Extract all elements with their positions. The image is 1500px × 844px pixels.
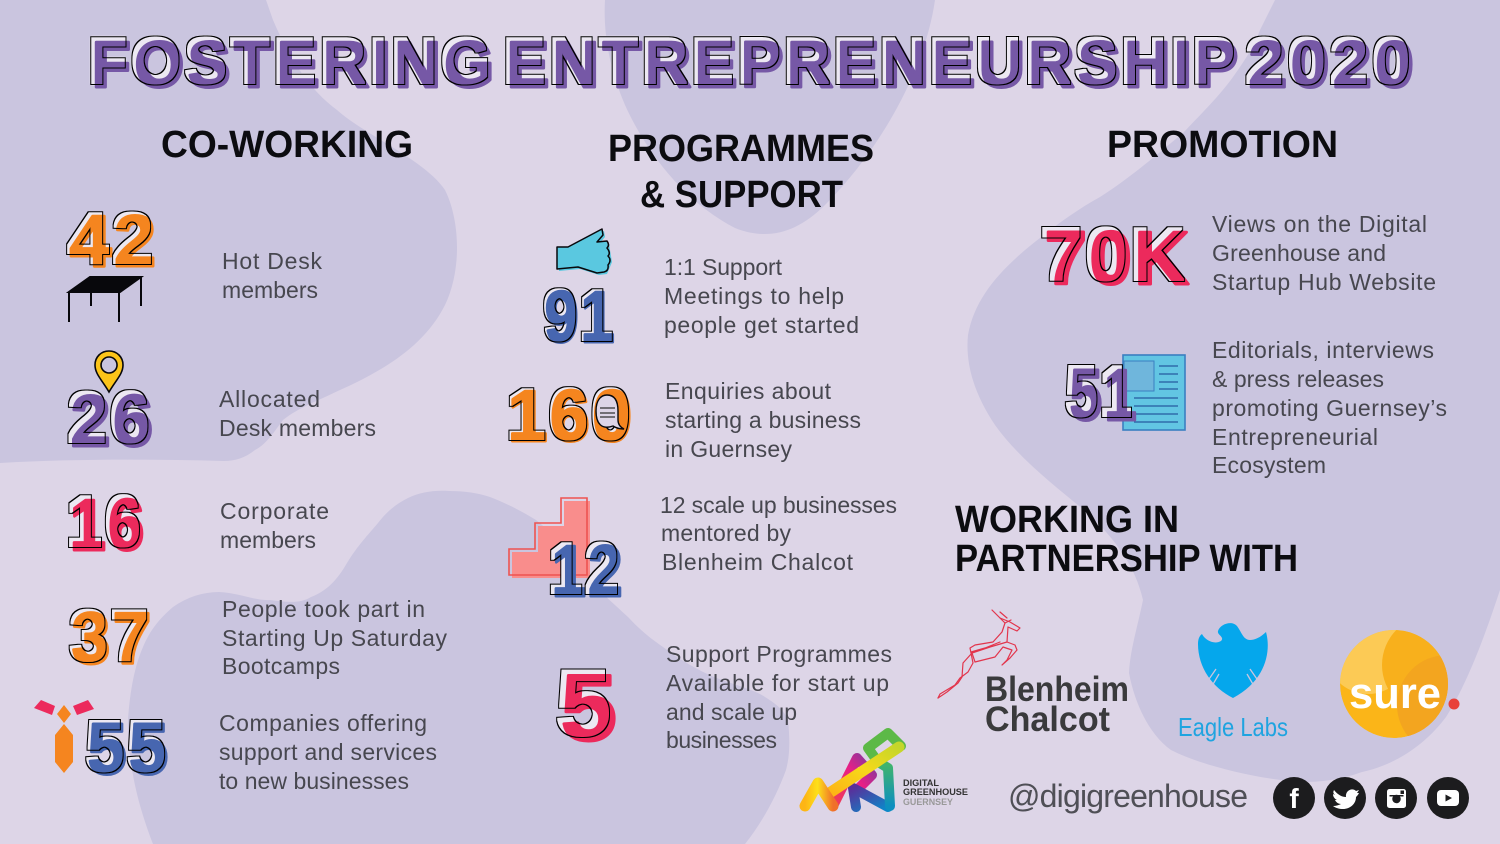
number 37: 37 [69,596,151,676]
social icons [1273,777,1469,819]
text: editorials [1212,337,1447,478]
number 26: 26 [67,378,152,458]
text: companies offering: to new businesses [219,768,409,794]
text: support programmes [666,641,892,753]
text: support meetings: 1:1 Support [664,254,783,280]
text: allocated desk members: Desk members [219,415,376,441]
icon: eagle [1198,623,1268,698]
number 42: 42 [67,199,156,279]
text: scale up businesses [660,492,897,575]
text: people took part: Starting Up Saturday [222,625,448,651]
icon: instagram [1375,777,1417,819]
wordmark: DIGITAL [903,778,939,789]
text: editorials: promoting Guernsey’s [1212,395,1447,421]
text: support meetings: Meetings to help [664,283,844,309]
stat: 51 editorials [1065,337,1447,478]
icon: twitter [1324,777,1366,819]
text: editorials: Entrepreneurial [1212,424,1378,450]
text: editorials: Editorials, interviews [1212,337,1434,363]
text: enquiries [665,378,861,462]
number 70K: 70K [1040,212,1187,296]
number 91: 91 [543,276,615,356]
number 91: 91 [545,278,617,358]
text: support programmes: businesses [666,727,777,753]
number 91: 91 [543,276,615,356]
title: ENTREPRENEURSHIP [503,24,1238,97]
title: 2020 [1249,28,1418,101]
number 42: 42 [70,202,159,282]
number 12: 12 [548,529,621,609]
number 16: 16 [66,482,143,562]
text: corporate members: members [220,527,316,553]
text: people took part: Bootcamps [222,653,340,679]
text: scale up businesses: 12 scale up businesses [660,492,897,518]
number 51: 51 [1065,352,1134,432]
stat: 70K website views [1040,211,1436,300]
text: hot desk members: Hot Desk [222,248,322,274]
icon: desk [69,277,141,322]
heading: programmes and support: PROGRAMMES [608,128,874,170]
title: FOSTERING [88,24,494,97]
title: 2020 [1245,24,1414,97]
heading: programmes and support: & SUPPORT [640,174,843,216]
number 26: 26 [67,378,152,458]
icon: stairs [509,498,590,578]
text: support meetings [664,254,859,338]
number 51: 51 [1065,352,1134,432]
text: website views [1212,211,1436,295]
icon: necktie [34,700,94,773]
text: hot desk members [222,248,322,303]
title: ENTREPRENEURSHIP [507,28,1242,101]
title [88,24,1418,101]
number 55: 55 [88,710,171,790]
text: enquiries: in Guernsey [665,436,792,462]
wordmark: Blenheim [985,670,1129,709]
social handle: @digigreenhouse [1008,778,1248,814]
number 12: 12 [548,529,621,609]
stat: 91 support meetings [543,229,859,358]
stat: 16 corporate members [66,482,329,566]
number 16: 16 [66,482,143,562]
number 37: 37 [72,599,154,679]
logo: Eagle Labs [1178,623,1288,742]
text: support programmes: Available for start up [666,670,889,696]
wordmark [985,670,1129,739]
text: corporate members [220,498,329,553]
text: allocated desk members [219,386,376,441]
number 160: 160 [508,377,635,457]
number 5: 5 [555,650,614,755]
number 37: 37 [69,596,151,676]
wordmark: GREENHOUSE [903,787,968,798]
text: allocated desk members: Allocated [219,386,320,412]
stat: 55 companies [34,700,437,794]
text: corporate members: Corporate [220,498,329,524]
stat: 26 allocated desk members [67,351,376,462]
icon: leaping antelope [938,610,1020,698]
stat: 5 support programmes [555,641,892,760]
number 55: 55 [85,707,168,787]
number 5: 5 [555,650,614,755]
text: companies offering: Companies offering [219,710,427,736]
number 26: 26 [71,382,156,462]
heading: working in partnership with: WORKING IN [955,499,1179,541]
logo: Blenheim Chalcot [938,610,1129,739]
text: enquiries: Enquiries about [665,378,832,404]
number 70K: 70K [1045,216,1192,300]
number 160: 160 [506,375,633,455]
text: editorials: & press releases [1212,366,1384,392]
number 42: 42 [67,199,156,279]
number 5: 5 [561,655,620,760]
wordmark: Eagle Labs [1178,712,1288,742]
number 16: 16 [70,486,147,566]
number 70K: 70K [1040,212,1187,296]
text: scale up businesses: Blenheim Chalcot [662,549,854,575]
stat: 42 hot desk members [67,199,322,322]
icon: colourful chain mark [805,733,901,807]
icon: youtube [1427,777,1469,819]
title: ENTREPRENEURSHIP [503,24,1238,97]
text: people took part [222,596,448,679]
heading: co-working: CO-WORKING [161,124,413,166]
wordmark [903,778,968,808]
title: FOSTERING [88,24,494,97]
text: enquiries: starting a business [665,407,861,433]
title: 2020 [1245,24,1414,97]
icon: location pin [95,351,123,392]
red dot [1448,698,1460,710]
logo: sure [1340,630,1460,738]
wordmark: Chalcot [985,700,1110,739]
text: companies offering: support and services [219,739,437,765]
text: support meetings: people get started [664,312,859,338]
text: people took part: People took part in [222,596,425,622]
icon: facebook: f [1289,783,1299,814]
wordmark: sure [1349,669,1441,718]
icon: facebook [1273,777,1315,819]
stat: 37 bootcamp attendees [69,596,448,679]
heading: working in partnership with [955,499,1298,580]
heading: working in partnership with: PARTNERSHIP WITH [955,538,1298,580]
stat: 160 enquiries [506,375,861,462]
stat: 12 scale up businesses [509,492,897,612]
text: support programmes: and scale up [666,699,797,725]
icon: speech bubble [596,395,624,429]
heading: promotion: PROMOTION [1107,124,1338,166]
number 51: 51 [1070,356,1139,436]
icon: orange sphere [1340,630,1448,738]
text: website views: Startup Hub Website [1212,269,1436,295]
icon: newspaper [1123,355,1185,430]
text: support programmes: Support Programmes [666,641,892,667]
number 160: 160 [506,375,633,455]
heading: programmes and support [608,128,874,216]
number 12: 12 [552,532,625,612]
text: scale up businesses: mentored by [661,520,792,546]
title: FOSTERING [92,28,498,101]
icon: thumbs up [557,229,612,275]
text: editorials: Ecosystem [1212,452,1326,478]
text: companies offering [219,710,437,794]
text: website views: Greenhouse and [1212,240,1386,266]
wordmark: GUERNSEY [903,797,954,808]
number 55: 55 [85,707,168,787]
logo: Digital Greenhouse Guernsey [805,733,968,808]
text: website views: Views on the Digital [1212,211,1427,237]
text: hot desk members: members [222,277,318,303]
